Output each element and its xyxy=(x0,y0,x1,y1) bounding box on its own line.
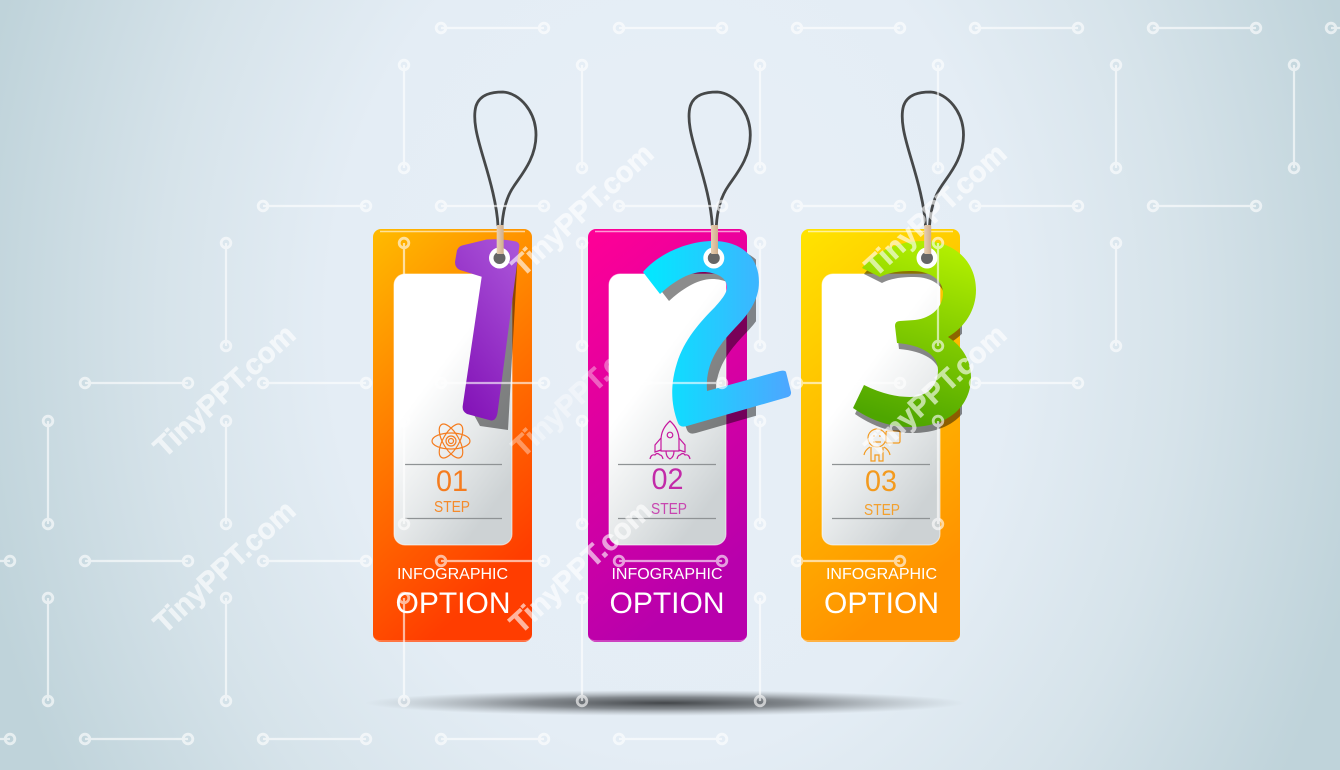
watermarks xyxy=(148,138,1013,640)
watermarks: TinyPPT.com xyxy=(859,138,1013,283)
string and eyelet 2 xyxy=(689,92,750,268)
tag 1 inner panel xyxy=(394,274,512,545)
step number 02: 02 xyxy=(652,463,684,496)
watermarks: TinyPPT.com xyxy=(148,495,302,640)
watermarks: TinyPPT.com xyxy=(148,319,302,464)
step label: STEP xyxy=(651,501,687,518)
panel: tag 3 xyxy=(801,229,960,642)
tag 1 body xyxy=(373,229,532,642)
infographic label: INFOGRAPHIC xyxy=(611,566,723,583)
icon: person with sign xyxy=(864,429,900,461)
option label: OPTION xyxy=(824,587,939,620)
numeral 1 xyxy=(455,239,519,430)
floor shadow xyxy=(365,690,965,716)
tag 3 body xyxy=(801,229,960,642)
tag 2 inner panel xyxy=(609,274,726,545)
panel: tag 2 xyxy=(588,229,747,642)
infographic label: INFOGRAPHIC xyxy=(397,566,508,583)
tag 3 inner panel xyxy=(822,274,940,545)
option label: OPTION xyxy=(609,587,725,620)
step label: STEP xyxy=(864,502,900,519)
step number 01: 01 xyxy=(436,465,468,498)
watermarks: TinyPPT.com xyxy=(506,319,660,464)
watermarks: TinyPPT.com xyxy=(506,138,660,283)
step number 03: 03 xyxy=(865,465,897,498)
option label: OPTION xyxy=(395,587,511,620)
panel: tag 1 xyxy=(373,229,532,642)
numeral 2 xyxy=(643,241,800,434)
watermarks: TinyPPT.com xyxy=(859,319,1013,464)
tag 2 body xyxy=(588,229,747,642)
string and eyelet 3 xyxy=(902,92,964,268)
icon: rocket xyxy=(650,421,690,459)
infographic label: INFOGRAPHIC xyxy=(826,566,937,583)
numeral 3 xyxy=(853,241,978,433)
step label: STEP xyxy=(434,499,470,516)
icon: atom xyxy=(432,421,470,461)
string and eyelet 1 xyxy=(475,92,536,268)
watermarks: TinyPPT.com xyxy=(504,495,658,640)
